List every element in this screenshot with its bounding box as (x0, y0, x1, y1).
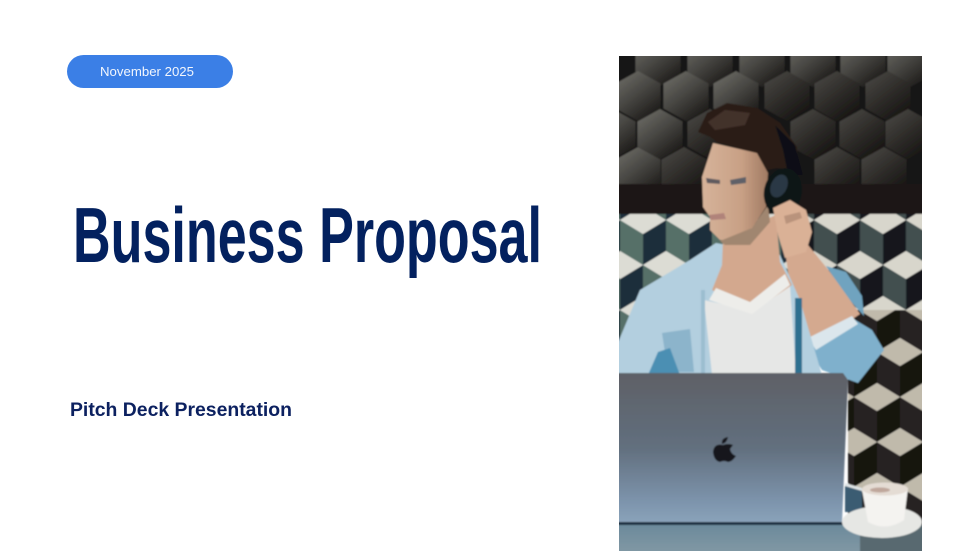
hexagon wall (619, 56, 922, 186)
subtitle: Pitch Deck Presentation (70, 399, 292, 421)
title: Business Proposal (73, 191, 542, 279)
photo: man with headphones at laptop (619, 56, 922, 551)
cube tiles (605, 214, 936, 530)
date pill (67, 55, 233, 88)
dark ledge (605, 184, 936, 214)
laptop (619, 372, 861, 551)
date pill: November 2025 (100, 64, 194, 79)
coffee cup (840, 482, 922, 551)
slide (67, 55, 922, 551)
man (605, 103, 884, 383)
apple logo (713, 437, 736, 462)
